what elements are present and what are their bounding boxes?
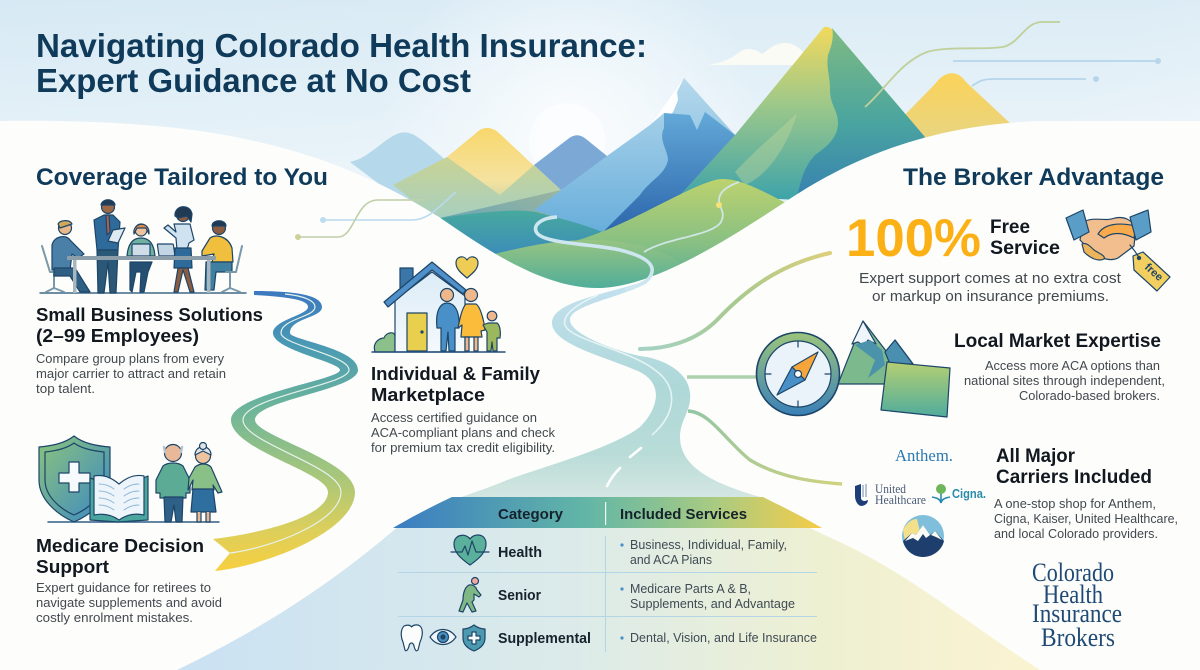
seated person right <box>202 221 233 290</box>
seated woman <box>127 224 155 292</box>
logo: UnitedHealthcare <box>855 482 926 507</box>
text: medicare: Medicare Decision <box>36 535 204 556</box>
snow cap <box>650 78 684 128</box>
right top decor lines <box>865 22 1161 107</box>
text: local expertise: Colorado-based brokers. <box>1019 388 1160 403</box>
row: supplemental: Dental, Vision, and Life Insurance <box>630 630 817 645</box>
big mountain left face <box>680 27 842 200</box>
row: supplemental: Supplemental <box>498 630 591 647</box>
table header: Category <box>498 506 564 523</box>
winding ribbon path <box>213 291 358 571</box>
text: all major carriers: Carriers Included <box>996 467 1152 488</box>
bush <box>374 333 395 352</box>
big mountain right face <box>780 28 925 215</box>
icon: team at table <box>40 200 246 293</box>
icon: eye <box>430 630 456 644</box>
text: medicare: costly enrolment mistakes. <box>36 610 193 625</box>
Colorado state <box>881 362 950 417</box>
text: small business: Small Business Solutions <box>36 304 263 325</box>
text: local expertise: Access more ACA options than <box>985 358 1160 373</box>
stat: 100% free service: or markup on insurance premiums. <box>872 288 1109 305</box>
standing woman <box>164 207 194 292</box>
price tag: free <box>1142 261 1165 284</box>
text: small business: (2–99 Employees) <box>36 325 199 346</box>
carrier logos <box>855 446 986 557</box>
road centre line <box>565 295 672 435</box>
roof <box>384 262 466 307</box>
text: local expertise <box>954 331 1165 403</box>
row: senior <box>459 578 795 612</box>
teal slope <box>440 190 600 260</box>
door <box>407 313 427 351</box>
book <box>90 475 148 522</box>
laptop <box>157 244 175 256</box>
logo: Colorado Health Insurance Brokers: Health <box>1043 580 1103 609</box>
icon: handshake and free tag <box>1066 210 1170 291</box>
pale blue peak <box>350 132 500 215</box>
mountain range <box>350 27 1012 300</box>
text: medicare <box>36 535 222 625</box>
pale ridge <box>735 113 797 185</box>
table <box>67 256 216 293</box>
senior man <box>156 444 190 522</box>
title: Navigating Colorado Health Insurance: <box>36 27 647 64</box>
connector: free service <box>640 253 830 349</box>
text: all major carriers: A one-stop shop for Anthem, <box>994 496 1156 511</box>
icon: house and family <box>372 257 505 352</box>
text: local expertise: national sites through independent, <box>964 373 1165 388</box>
row: senior: Medicare Parts A & B, <box>630 581 751 596</box>
title <box>36 27 647 99</box>
sun <box>529 103 605 179</box>
text: individual and family: Marketplace <box>371 384 485 405</box>
text: all major carriers: All Major <box>996 446 1076 467</box>
connector: local expertise <box>687 375 757 379</box>
logo: Colorado Health Insurance Brokers <box>1032 558 1122 652</box>
row: health <box>451 535 787 567</box>
stat: 100% free service: Free <box>990 217 1030 238</box>
green front hill <box>495 240 680 300</box>
connector: carriers <box>688 411 842 484</box>
text: medicare: navigate supplements and avoid <box>36 595 222 610</box>
icon: compass with mountains and Colorado <box>756 321 950 417</box>
road dashes <box>607 448 641 486</box>
compass <box>756 332 840 416</box>
heading: coverage tailored: Coverage Tailored to You <box>36 164 328 191</box>
text: individual and family: Individual & Family <box>371 363 541 384</box>
stat: 100% free service <box>846 209 1122 305</box>
row: senior: Supplements, and Advantage <box>630 596 795 611</box>
mid blue peak <box>534 135 610 200</box>
row: supplemental <box>401 625 817 651</box>
text: individual and family <box>371 363 555 455</box>
text: small business: Compare group plans from every <box>36 351 224 366</box>
icon: tooth <box>401 625 422 651</box>
left chair <box>42 246 64 292</box>
small stream on hill <box>644 182 739 252</box>
senior woman <box>188 442 222 522</box>
logo: UnitedHealthcare: Healthcare <box>875 493 926 507</box>
text: small business: major carrier to attract and retain <box>36 366 226 381</box>
table <box>393 497 822 652</box>
main road <box>400 283 822 528</box>
text: individual and family: ACA-compliant plans and check <box>371 425 555 440</box>
text: all major carriers <box>994 446 1178 541</box>
row: health: Business, Individual, Family, <box>630 537 787 552</box>
text: individual and family: for premium tax credit eligibility. <box>371 440 555 455</box>
table header: Included Services <box>620 506 747 523</box>
logo: Colorado Health Insurance Brokers: Brokers <box>1041 623 1115 652</box>
row: health: and ACA Pians <box>630 552 712 567</box>
shield <box>39 436 110 522</box>
text: medicare: Support <box>36 556 109 577</box>
chimney <box>400 268 413 288</box>
row: senior: Senior <box>498 587 541 604</box>
mountains <box>838 321 913 384</box>
standing man <box>94 200 125 293</box>
left decor lines <box>295 192 456 240</box>
logo: mountain badge <box>902 515 944 557</box>
woman <box>458 288 485 351</box>
text: all major carriers: Cigna, Kaiser, United Healthcare, <box>994 511 1178 526</box>
heading: broker advantage: The Broker Advantage <box>903 164 1164 191</box>
yellow waypoint <box>716 202 722 208</box>
text: small business: top talent. <box>36 381 95 396</box>
logo: Anthem: Anthem. <box>895 446 953 465</box>
wall <box>395 272 465 352</box>
teal left hill <box>440 211 603 262</box>
seated person left <box>52 221 90 292</box>
cloud <box>708 43 814 65</box>
yellow peak <box>440 128 560 215</box>
icon: senior walking <box>459 578 481 612</box>
right chair <box>222 246 242 292</box>
logo: Colorado Health Insurance Brokers: Colorado <box>1032 558 1114 587</box>
green right hill <box>575 179 790 290</box>
text: medicare: Expert guidance for retirees to <box>36 580 211 595</box>
stat: 100% free service: Service <box>990 238 1060 259</box>
text: small business <box>36 304 263 396</box>
icon: heart pulse <box>451 535 489 565</box>
title: Expert Guidance at No Cost <box>36 62 471 99</box>
pale base hill behind table <box>177 475 1040 670</box>
text: all major carriers: and local Colorado providers. <box>994 526 1158 541</box>
row: health: Health <box>498 544 542 561</box>
olive overlap <box>393 157 561 222</box>
text: individual and family: Access certified guidance on <box>371 410 537 425</box>
text: local expertise: Local Market Expertise <box>954 331 1161 352</box>
man <box>437 288 459 351</box>
logo: UnitedHealthcare: United <box>875 482 907 496</box>
dark blue face <box>603 112 735 232</box>
child <box>483 311 500 351</box>
stat: 100% free service: 100% <box>846 209 981 268</box>
upper stream in hills <box>536 217 652 290</box>
table header <box>393 497 822 528</box>
icon: shield, book and seniors <box>39 436 222 522</box>
right yellow peak <box>895 73 1012 160</box>
heart <box>456 257 478 278</box>
icon: shield plus <box>463 625 485 651</box>
logo: Cigna: Cigna. <box>952 486 986 501</box>
light blue big peak <box>534 78 735 232</box>
stat: 100% free service: Expert support comes at no extra cost <box>859 270 1122 287</box>
logo: Colorado Health Insurance Brokers: Insurance <box>1032 599 1122 628</box>
